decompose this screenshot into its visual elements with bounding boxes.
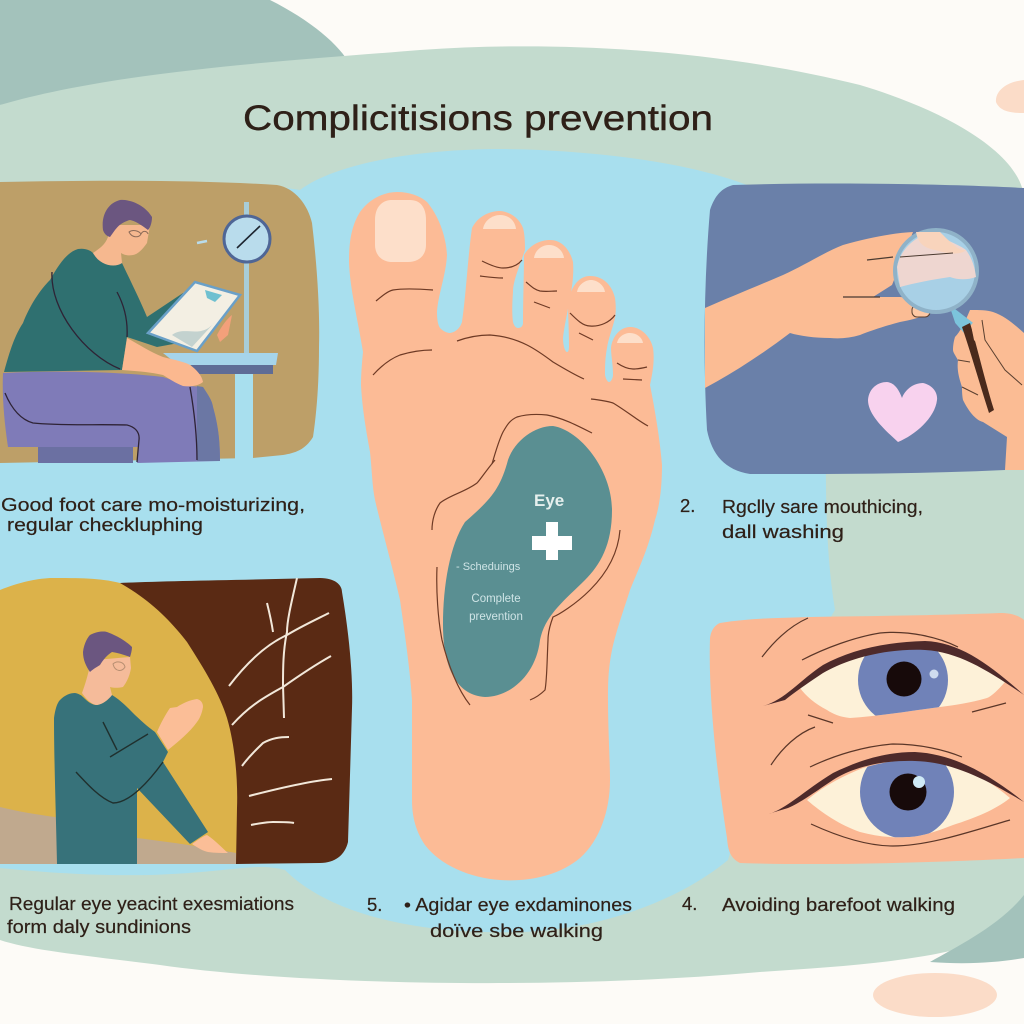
panel: patient reading a chart [0, 181, 319, 463]
text block: item 1: Good foot care mo-moisturizing, [1, 494, 305, 515]
arch patch: teal [443, 426, 612, 697]
clipboard [148, 282, 240, 351]
background blob: peach top right [996, 80, 1024, 113]
panel: person and skin texture [0, 578, 352, 864]
panel: hand with magnifying glass [705, 184, 1024, 474]
skin lines [229, 578, 332, 825]
text block: item 5: • Agidar eye exdaminones [404, 894, 632, 915]
text block: item 2: 2. [680, 495, 695, 516]
text block: item 3 [7, 893, 294, 937]
text block: item 2: dall washing [722, 521, 844, 542]
toenails [375, 200, 643, 343]
icon: second hand [953, 310, 1024, 470]
foot illustration [349, 192, 662, 880]
text block: item 5: doïve sbe walking [430, 920, 603, 941]
text block: item 5: 5. [367, 894, 382, 915]
background blob: bottom right teal [930, 895, 1024, 963]
text block: item 3: form daly sundinions [7, 916, 191, 937]
desk [163, 353, 278, 460]
icon: lower eye [768, 727, 1024, 846]
text block: item 4: 4. [682, 893, 697, 914]
icon: wall gauge [197, 202, 270, 353]
finger creases [958, 320, 1022, 395]
text block: item 4: Avoiding barefoot walking [722, 894, 955, 915]
background blob: teal top left [0, 0, 350, 105]
figure: standing person [54, 631, 228, 864]
background blob: peach bottom right [873, 973, 997, 1017]
foot creases [373, 260, 648, 464]
label: Eye: Eye [534, 491, 564, 510]
text block: item 2: Rgclly sare mouthicing, [722, 496, 923, 517]
icon: plus [532, 522, 572, 560]
small label: Complete: Complete [471, 593, 521, 605]
text block: item 1 [1, 494, 305, 535]
small label: prevention: prevention [469, 611, 523, 623]
small label: Schedulings: - Scheduings [456, 561, 521, 573]
arch outlines [432, 460, 620, 705]
title: Complicitisions prevention [243, 98, 713, 138]
figure: seated person [3, 200, 220, 463]
icon: upper eye [762, 618, 1024, 725]
icon: heart [868, 382, 937, 442]
icon: hand [705, 232, 931, 388]
text block: item 5 [367, 894, 632, 941]
text block: item 2 [680, 495, 923, 542]
icon: magnifying glass [895, 230, 994, 413]
text block: item 1: regular checkluphing [7, 514, 203, 535]
background blob: light blue behind foot [0, 149, 835, 932]
text block: item 3: Regular eye yeacint exesmiations [9, 893, 294, 914]
panel: eyes [710, 613, 1024, 864]
